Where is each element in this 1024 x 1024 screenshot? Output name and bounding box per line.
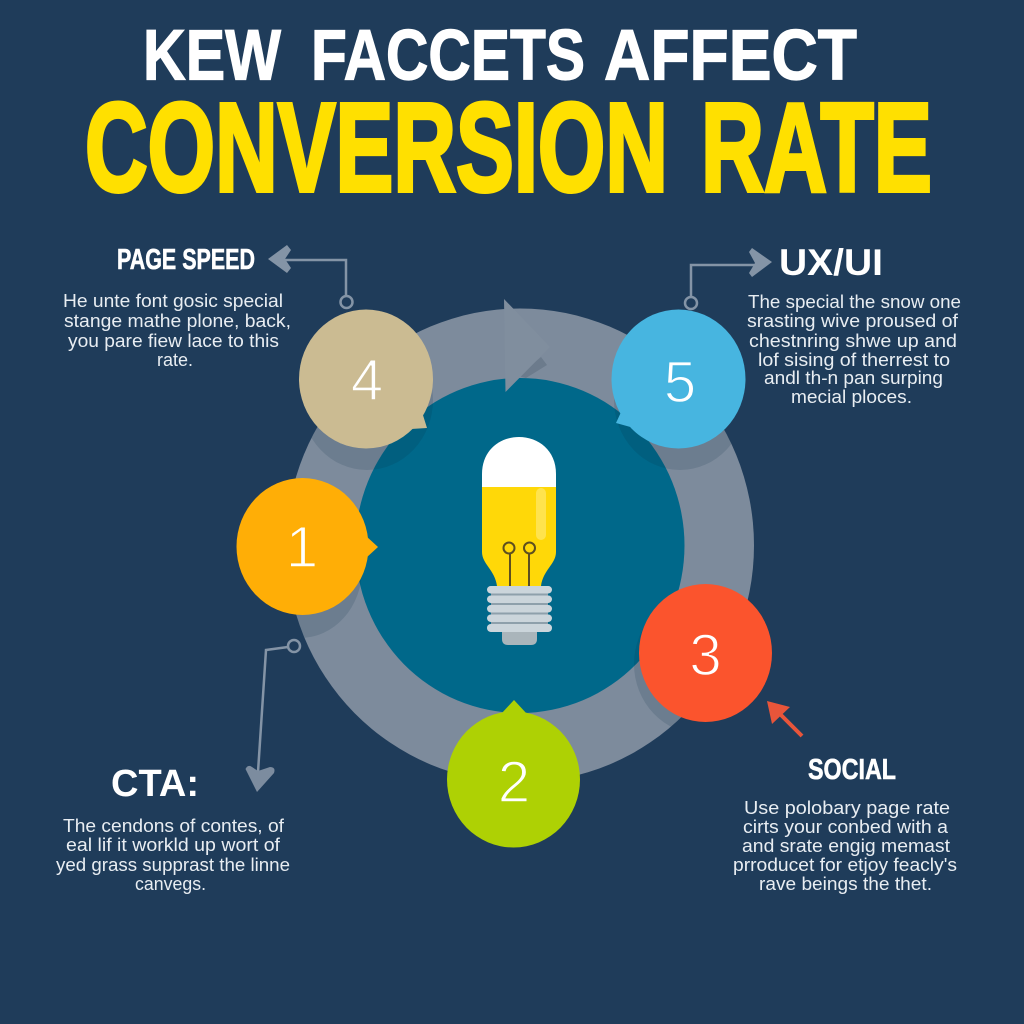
text: ux/ui: andl th-n pan surping: [764, 367, 943, 388]
arrow: ux/ui connector: [685, 248, 772, 309]
node 4: 4: [351, 348, 383, 413]
title: [85, 16, 932, 218]
title: AFFECT: [604, 16, 857, 96]
ring arrow: [504, 299, 550, 392]
node 1: [236, 478, 378, 615]
text: page speed: [63, 290, 291, 370]
text: social: cirts your conbed with a: [743, 816, 949, 837]
ring: [286, 308, 754, 782]
text: cta: eal lif it workld up wort of: [66, 834, 281, 855]
title: KEW: [143, 16, 281, 96]
text: ux/ui: chestnring shwe up and: [749, 330, 957, 351]
node 5: 5: [664, 350, 696, 415]
text: ux/ui: mecial ploces.: [791, 386, 912, 407]
node 5: [612, 310, 746, 448]
text: page speed: you pare fiew lace to this: [68, 330, 279, 351]
text: cta: yed grass supprast the linne: [56, 854, 290, 875]
title: CONVERSION: [85, 77, 668, 218]
arrow: social: [767, 701, 802, 736]
node 3: 3: [689, 623, 722, 688]
node 1: 1: [286, 515, 318, 580]
text: cta: The cendons of contes, of: [63, 815, 285, 836]
text: ux/ui: [747, 291, 961, 407]
text: page speed: He unte font gosic special: [63, 290, 283, 311]
text: social: [733, 797, 957, 894]
text: social: Use polobary page rate: [744, 797, 950, 818]
text: page speed: stange mathe plone, back,: [64, 310, 291, 331]
text: social: prroducet for etjoy feacly's: [733, 854, 957, 875]
text: ux/ui: lof sising of therrest to: [758, 349, 950, 370]
heading: social: SOCIAL: [808, 754, 896, 786]
node 4: [299, 310, 433, 448]
arrow: cta connector: [246, 640, 300, 792]
text: page speed: rate.: [157, 349, 193, 370]
icon: light bulb: [482, 437, 556, 645]
text: social: and srate engig memast: [742, 835, 950, 856]
node shadows: [296, 390, 731, 726]
text: social: rave beings the thet.: [759, 873, 932, 894]
arrow: page speed connector: [268, 245, 352, 308]
center circle: [356, 378, 684, 713]
title: FACCETS: [311, 16, 585, 96]
heading: cta: CTA:: [111, 763, 199, 805]
heading: page speed: PAGE SPEED: [117, 244, 255, 276]
text: ux/ui: srasting wive proused of: [747, 310, 959, 331]
node 2: [447, 700, 580, 848]
heading: ux/ui: UX/UI: [779, 242, 883, 283]
node 2: 2: [498, 750, 530, 815]
node 3: [639, 584, 772, 722]
text: cta: [56, 815, 290, 894]
text: cta: canvegs.: [135, 873, 206, 894]
text: ux/ui: The special the snow one: [748, 291, 961, 312]
